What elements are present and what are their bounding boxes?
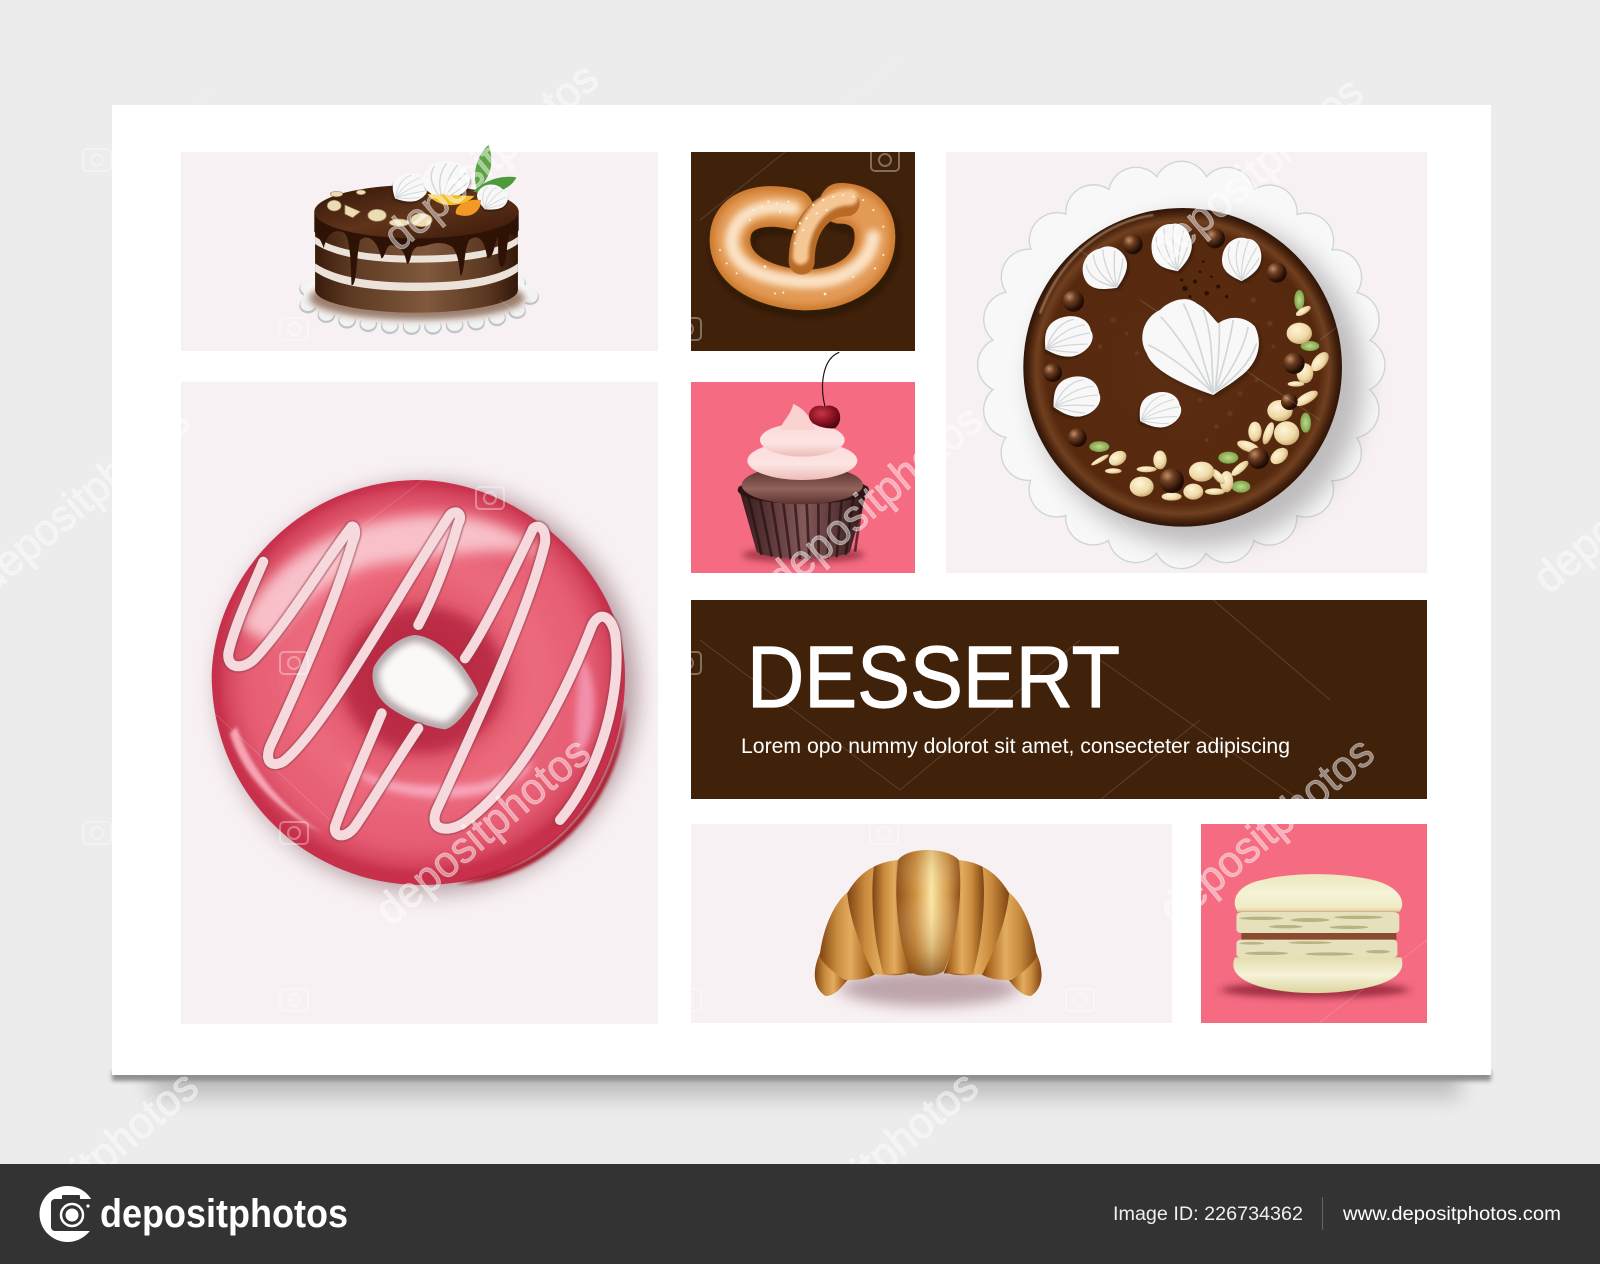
white card [112,105,1491,1075]
icon: croissant [815,850,1042,1007]
panel: macaron [1201,824,1427,1023]
nuts on cake [327,190,432,227]
meringue [383,168,434,211]
icon: pink glazed donut [212,480,637,892]
icon: pretzel [719,194,884,295]
heading: DESSERT [747,629,1120,726]
footer logo icon [40,1186,96,1242]
meringues [1034,222,1266,437]
nuts [1090,304,1332,501]
icon: tart on doily [1005,188,1363,547]
watermark: depositphotos text: depositphotos [754,1061,988,1264]
watermark: camera icons [83,149,1489,1011]
panel: donut [181,382,658,1024]
footer logo wordmark: depositphotos [100,1192,348,1236]
panel: chocolate tart top view [946,152,1427,573]
image id: Image ID: 226734362 [1113,1204,1303,1225]
orange slices [427,194,474,205]
site url: www.depositphotos.com [1342,1204,1561,1225]
card shadow [112,1062,1491,1098]
icon: cupcake with cherry [738,352,869,563]
watermark: depositphotos text: depositphotos [758,395,992,603]
subtitle: Lorem opo nummy dolorot sit amet, consecteter adipiscing [741,735,1290,758]
watermark: diagonal lines [112,60,1491,1030]
watermark: depositphotos text: depositphotos [1150,727,1384,935]
icon: macaron [1220,874,1409,998]
sesame seeds [719,194,884,295]
watermark: depositphotos text: depositphotos [366,727,600,935]
watermark: depositphotos text: depositphotos [374,53,608,261]
chocolate balls [1043,228,1287,447]
footer bar [0,1164,1600,1264]
cocoa speckles [1180,260,1228,298]
panel: pretzel [691,152,915,351]
drizzle icing [228,512,617,835]
watermark: depositphotos text: depositphotos [1139,67,1373,275]
icon: layered chocolate cake [304,145,530,327]
donut highlights [230,515,595,833]
panel: cupcake [691,352,915,573]
panel: croissant [691,824,1172,1023]
donut hole [373,635,478,729]
leaves [475,145,491,190]
panel: title banner [691,600,1427,799]
big heart meringue [1142,299,1262,398]
panel: chocolate cake side view [181,145,658,351]
pistachios [1089,290,1319,493]
